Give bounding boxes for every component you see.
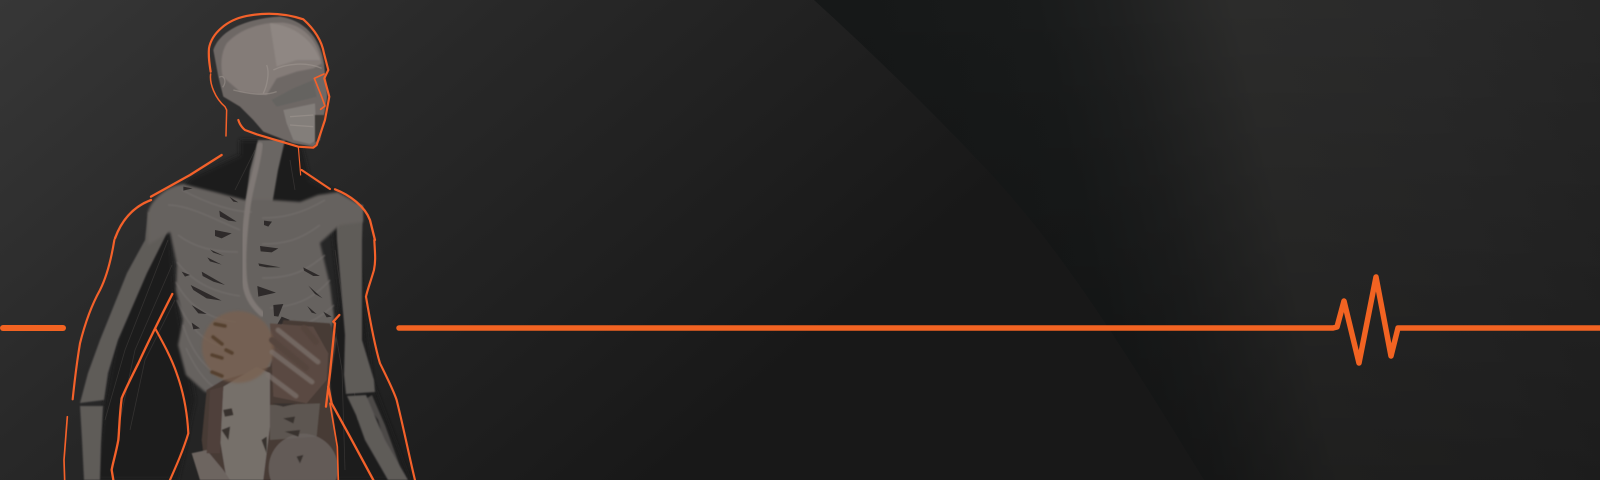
orange body outline: arms and waist [64,240,415,480]
lower rib bars over organs [212,324,318,396]
pulse line: left segment [3,325,63,331]
rib gaps [182,187,332,329]
orange body outline: head [115,14,375,240]
skull [213,17,327,147]
pulse line with heartbeat spike [399,277,1600,363]
liver [202,311,274,383]
left arm bones [80,212,172,480]
neck [245,140,285,205]
right arm bones [336,205,408,480]
dark muscle shadows [95,140,410,480]
torso and rib cage [148,184,363,392]
abdomen and intestines [192,320,338,480]
esophagus [244,145,262,314]
human figure [64,14,415,480]
